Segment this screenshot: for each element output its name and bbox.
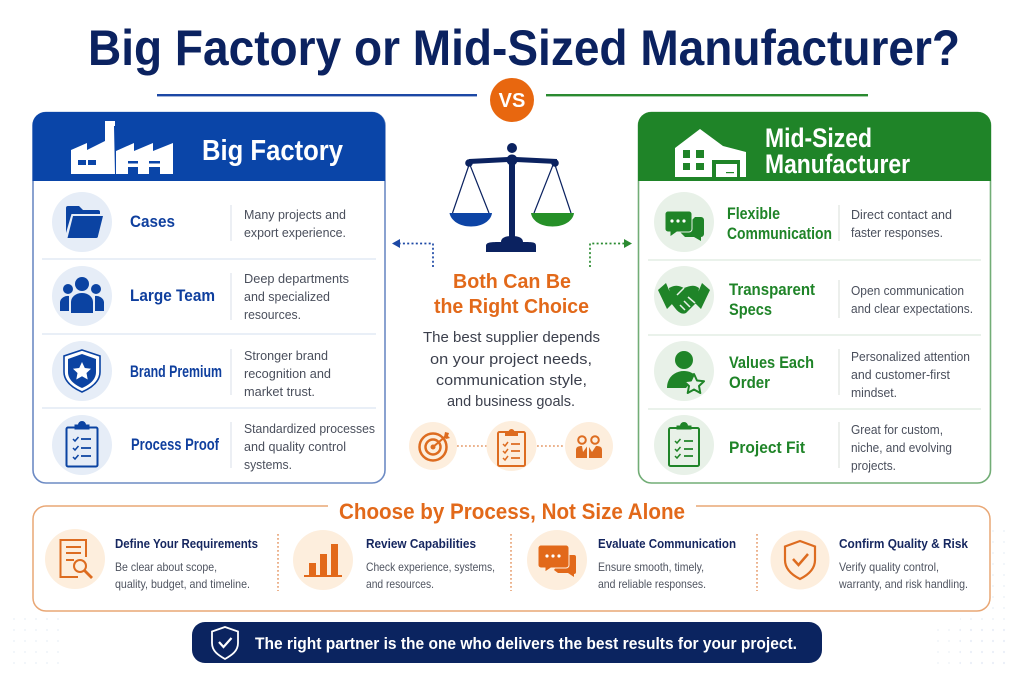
row: process proof: Process Proof bbox=[131, 435, 219, 454]
step: review capabilities: Check experience, systems, bbox=[366, 560, 495, 574]
row: brand premium: Stronger brand bbox=[244, 348, 328, 363]
step: define requirements: Define Your Requirements bbox=[115, 536, 258, 551]
row: values each order bbox=[654, 341, 970, 401]
center text: The best supplier depends bbox=[423, 329, 600, 346]
step: confirm quality: Verify quality control, bbox=[839, 560, 939, 574]
center icons row bbox=[409, 421, 613, 471]
panel heading: Big Factory bbox=[202, 135, 343, 167]
icon: handshake bbox=[658, 283, 710, 314]
icon: bar chart bbox=[304, 544, 342, 577]
row: large team: Deep departments bbox=[244, 271, 349, 286]
step: confirm quality bbox=[770, 530, 969, 591]
step: evaluate communication: and reliable responses. bbox=[598, 577, 706, 591]
row: cases: Cases bbox=[130, 212, 175, 231]
row: transparent specs: Transparent bbox=[729, 280, 815, 299]
row: transparent specs: Open communication bbox=[851, 283, 964, 298]
icon: team bbox=[60, 277, 104, 313]
row: flexible communication: faster responses. bbox=[851, 225, 943, 240]
step: evaluate communication bbox=[527, 530, 736, 591]
row: project fit: niche, and evolving bbox=[851, 440, 952, 455]
icon: shield star bbox=[64, 350, 100, 392]
row: transparent specs bbox=[654, 266, 973, 326]
row: values each order: and customer-first bbox=[851, 367, 950, 382]
panel header: mid-sized manufacturer: Manufacturer bbox=[765, 149, 910, 179]
banner: conclusion bbox=[192, 622, 822, 663]
panel: choose by process bbox=[33, 499, 990, 611]
icon: factory bbox=[71, 121, 173, 174]
step: define requirements: Be clear about scope, bbox=[115, 560, 217, 574]
row: project fit bbox=[654, 415, 952, 475]
row: large team: and specialized bbox=[244, 289, 330, 304]
step: confirm quality: warranty, and risk handling. bbox=[838, 577, 968, 591]
icon: person with star bbox=[667, 351, 704, 393]
center heading: Both Can Be bbox=[453, 271, 571, 293]
row: flexible communication: Flexible bbox=[727, 204, 780, 223]
row: values each order: mindset. bbox=[851, 385, 897, 400]
center text: on your project needs, bbox=[430, 351, 592, 368]
step: evaluate communication: Ensure smooth, timely, bbox=[598, 560, 704, 574]
row: transparent specs: Specs bbox=[729, 300, 772, 319]
row: brand premium: recognition and bbox=[244, 366, 331, 381]
panel header: big factory bbox=[32, 112, 385, 181]
step: confirm quality: Confirm Quality & Risk bbox=[839, 536, 969, 551]
row: flexible communication: Direct contact and bbox=[851, 207, 952, 222]
section heading: Choose by Process, Not Size Alone bbox=[339, 499, 685, 524]
row: cases: Many projects and bbox=[244, 207, 346, 222]
row: process proof: and quality control bbox=[244, 439, 346, 454]
row: flexible communication: Communication bbox=[727, 224, 832, 243]
step: review capabilities: and resources. bbox=[366, 577, 434, 591]
row: project fit: projects. bbox=[851, 458, 896, 473]
row: project fit: Project Fit bbox=[729, 438, 805, 457]
step: define requirements: quality, budget, and timeline. bbox=[115, 577, 250, 591]
vs badge with divider lines: VS bbox=[499, 90, 525, 112]
icon: partners bbox=[565, 422, 613, 470]
row: project fit: Great for custom, bbox=[851, 422, 943, 437]
banner: conclusion: The right partner is the one who delivers the best results for your project. bbox=[255, 634, 797, 653]
icon: target bbox=[409, 422, 457, 470]
center text: communication style, bbox=[436, 372, 587, 389]
icon: chat bubbles bbox=[665, 211, 704, 241]
center heading: the Right Choice bbox=[434, 296, 589, 318]
center text bbox=[423, 329, 600, 410]
step: review capabilities bbox=[293, 530, 495, 591]
row: brand premium bbox=[52, 341, 331, 401]
vs badge with divider lines bbox=[157, 78, 868, 122]
icon: chat bubbles bbox=[538, 545, 576, 577]
row: values each order: Values Each bbox=[729, 353, 814, 372]
row: flexible communication bbox=[654, 192, 952, 252]
icon: balance scale bbox=[450, 143, 574, 252]
row: brand premium: Brand Premium bbox=[130, 362, 222, 381]
title: Big Factory or Mid-Sized Manufacturer? bbox=[88, 20, 960, 76]
step: define requirements bbox=[45, 529, 258, 591]
icon: folder bbox=[66, 206, 103, 238]
icon: clipboard bbox=[486, 421, 536, 471]
row: values each order: Personalized attention bbox=[851, 349, 970, 364]
row: process proof: Standardized processes bbox=[244, 421, 375, 436]
row: process proof: systems. bbox=[244, 457, 292, 472]
row: values each order: Order bbox=[729, 373, 770, 392]
row: large team bbox=[52, 266, 349, 326]
arrow: to big factory bbox=[392, 239, 433, 267]
icon: building bbox=[675, 129, 746, 177]
panel header: mid-sized manufacturer bbox=[638, 112, 991, 181]
row: large team: resources. bbox=[244, 307, 301, 322]
icon: document search bbox=[60, 540, 92, 578]
row: brand premium: market trust. bbox=[244, 384, 315, 399]
row: large team: Large Team bbox=[130, 286, 215, 305]
row: transparent specs: and clear expectations. bbox=[851, 301, 973, 316]
icon: clipboard bbox=[66, 422, 98, 466]
row: process proof bbox=[52, 415, 375, 475]
step: review capabilities: Review Capabilities bbox=[366, 536, 476, 551]
row: cases bbox=[52, 192, 346, 252]
panel: mid-sized manufacturer bbox=[638, 112, 991, 483]
arrow: to mid-sized manufacturer bbox=[590, 239, 632, 267]
center text: and business goals. bbox=[447, 393, 575, 410]
panel heading: Mid-Sized bbox=[765, 123, 872, 153]
panel: big factory bbox=[32, 112, 385, 483]
step: evaluate communication: Evaluate Communication bbox=[598, 536, 736, 551]
icon: clipboard bbox=[669, 423, 699, 466]
icon: shield check bbox=[212, 627, 238, 659]
center heading bbox=[434, 271, 589, 318]
row: cases: export experience. bbox=[244, 225, 346, 240]
icon: shield check bbox=[785, 541, 815, 579]
